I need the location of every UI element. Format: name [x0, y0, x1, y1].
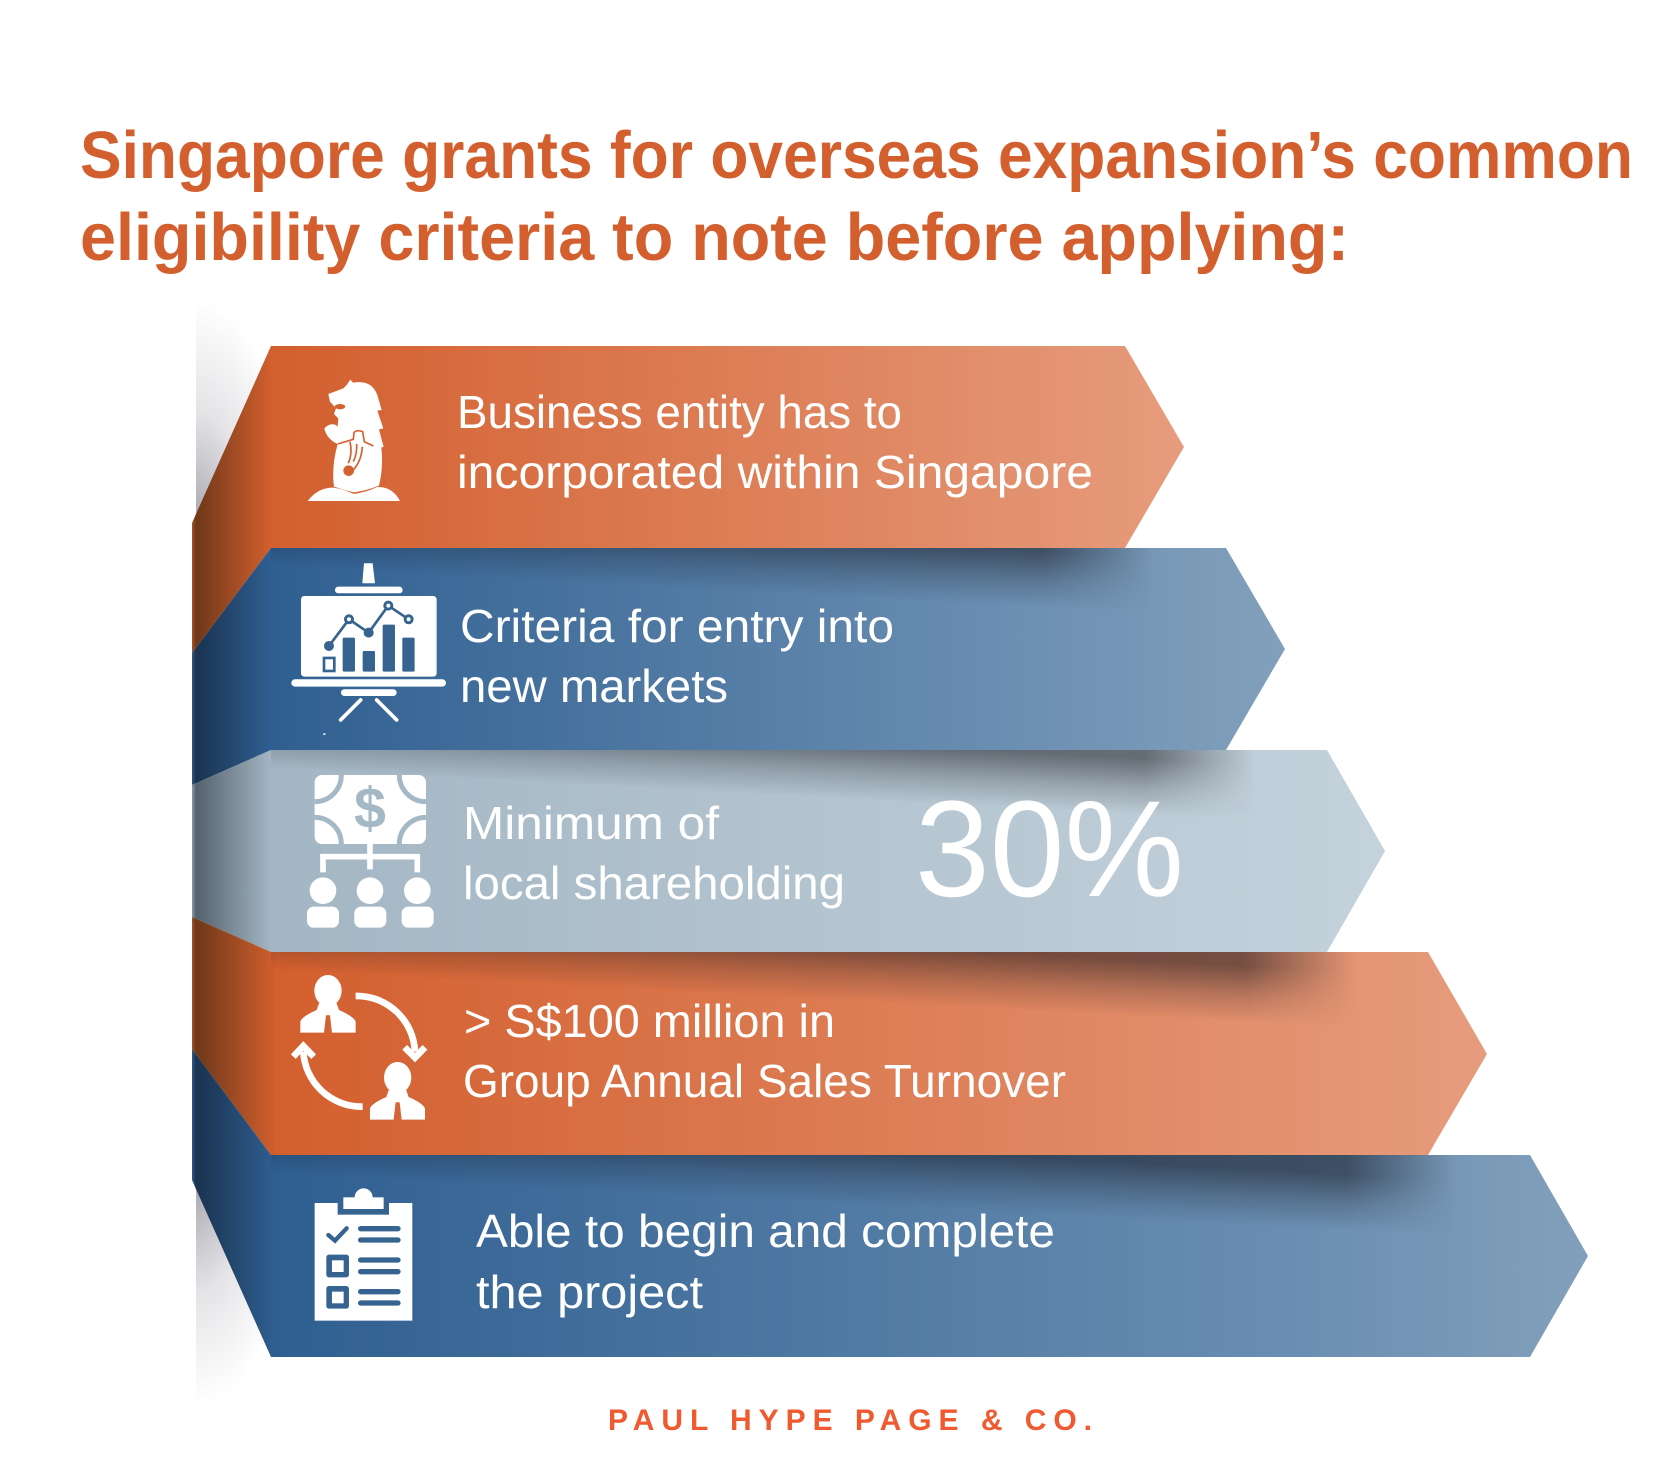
band shadow	[271, 750, 1246, 810]
drop shadow: bottom left	[196, 1180, 296, 1405]
text: criteria: new markets	[460, 660, 728, 712]
text: criteria: Criteria for entry into	[460, 600, 894, 652]
icon: clipboard	[315, 1188, 412, 1321]
panel: sales turnover	[192, 917, 1487, 1155]
text: turnover: Group Annual Sales Turnover	[463, 1055, 1066, 1107]
panel: local shareholding	[192, 748, 1385, 952]
band shadow	[271, 952, 1346, 1018]
text: turnover	[463, 995, 1066, 1107]
title: eligibility criteria to note before applying:	[80, 200, 1349, 275]
icon: merlion	[308, 380, 400, 501]
text: entity: Business entity has to	[457, 386, 902, 438]
icon: money and shareholders: $	[354, 777, 386, 841]
text: entity: incorporated within Singapore	[457, 446, 1093, 498]
band shadow	[271, 548, 1144, 602]
icon: people cycle	[293, 975, 425, 1120]
panel: incorporated in Singapore	[192, 346, 1184, 653]
text: minimum: Minimum of	[463, 797, 719, 849]
footer brand: PAUL HYPE PAGE & CO.	[608, 1404, 1092, 1437]
text: turnover: > S$100 million in	[464, 995, 835, 1047]
text: project: the project	[476, 1266, 703, 1318]
title	[80, 118, 1633, 275]
panel: begin and complete project	[192, 1049, 1588, 1357]
big number: 30%: 30%	[915, 773, 1184, 926]
icon: presentation board	[291, 563, 446, 735]
text: project: Able to begin and complete	[476, 1205, 1055, 1257]
band shadow	[271, 1155, 1447, 1224]
icon: money and shareholders	[307, 775, 434, 928]
text: minimum	[463, 797, 845, 909]
text: criteria	[460, 600, 894, 712]
drop shadow: top left	[196, 300, 296, 525]
panel: new markets	[192, 548, 1285, 785]
text: project	[476, 1205, 1055, 1318]
text: minimum: local shareholding	[463, 857, 845, 909]
text: entity	[457, 386, 1093, 498]
